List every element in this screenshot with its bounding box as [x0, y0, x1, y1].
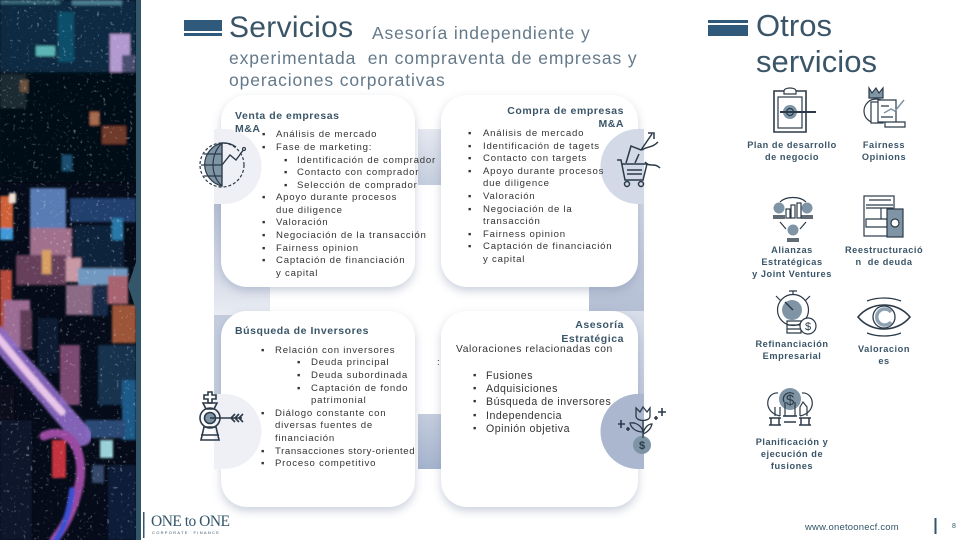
text: Búsqueda de Inversores	[235, 325, 415, 469]
label: Fairness	[863, 140, 905, 150]
label: Estratégicas	[761, 257, 823, 267]
list: Venta services: Fase de marketing:	[276, 142, 372, 153]
list: Venta services: Análisis de mercado	[276, 129, 377, 140]
list: Compra services: y capital	[483, 254, 525, 265]
item: Planificación	[742, 388, 842, 473]
list: Compra services: Apoyo durante procesos	[483, 166, 604, 177]
list: Búsqueda services: Proceso competitivo	[275, 458, 376, 469]
label: fusiones	[771, 461, 813, 471]
list: Compra services: Fairness opinion	[483, 229, 566, 240]
item: Refinanciación	[755, 290, 829, 361]
heading: Servicios: Servicios	[229, 11, 353, 44]
label	[747, 140, 837, 162]
list: Asesoría topics: ▪	[473, 396, 477, 407]
list: Compra services: Análisis de mercado	[483, 128, 584, 139]
list: Búsqueda services	[261, 345, 415, 469]
intro: Valoraciones: Valoraciones relacionadas con	[456, 344, 613, 355]
list: Compra services: ▪	[468, 141, 472, 152]
panel: Venta de empresas	[221, 95, 415, 287]
list: Búsqueda services: Captación de fondo	[311, 383, 408, 394]
list: Búsqueda services: financiación	[275, 433, 335, 444]
heading: Otros servicios	[756, 8, 877, 79]
list: Búsqueda services: ▪	[261, 458, 265, 469]
icon: stopwatch with coins: $	[805, 321, 811, 333]
label: Planificación y	[756, 437, 828, 447]
icon: rose with dollar: $	[639, 440, 645, 452]
label: Plan de desarrollo	[747, 140, 837, 150]
panel: Búsqueda de Inversores	[221, 311, 415, 507]
footer: website: www.onetoonecf.com	[805, 522, 899, 533]
heading: Venta de empresas: M&A	[235, 123, 261, 135]
text: Compra de empresas	[468, 105, 624, 265]
intro: Valoraciones: :	[437, 357, 440, 368]
list: Asesoría topics: Opinión objetiva	[486, 423, 570, 435]
label	[742, 436, 842, 472]
label: es	[878, 356, 890, 366]
list: Compra services: ▪	[468, 128, 472, 139]
list: Búsqueda services: Transacciones story-oriented	[275, 446, 415, 457]
accent circles	[214, 129, 644, 469]
subheading text: Asesoría independiente y	[372, 23, 591, 43]
list: Venta services: ▪	[262, 243, 266, 254]
list: Asesoría topics: ▪	[473, 383, 477, 394]
list: Búsqueda services: Diálogo constante con	[275, 408, 386, 419]
list: Búsqueda services: ▪	[261, 345, 265, 356]
icon: shopping cart with chart	[617, 132, 660, 188]
list: Venta services: ▪	[284, 155, 288, 166]
list: Asesoría topics: Fusiones	[486, 370, 533, 382]
icon: documents	[863, 195, 904, 238]
list: Compra services: Captación de financiación	[483, 241, 612, 252]
icon: rose with dollar	[618, 406, 666, 454]
label: Valoracion	[858, 344, 910, 354]
label	[752, 245, 832, 279]
side strip with notch	[128, 0, 141, 540]
footer: logo: ONE to ONE	[151, 513, 230, 530]
list: Búsqueda services: Deuda principal	[311, 357, 389, 368]
list: Búsqueda services: patrimonial	[311, 395, 367, 406]
heading: Otros servicios: Otros	[756, 8, 832, 43]
list: Venta services: ▪	[262, 255, 266, 266]
heading: Asesoría Estratégica: Asesoría	[575, 319, 624, 331]
list: Búsqueda services: ▪	[297, 383, 301, 394]
heading: Venta de empresas: Venta de empresas	[235, 110, 340, 122]
label: Empresarial	[763, 351, 821, 361]
heading: Compra de empresas	[507, 105, 624, 130]
list: Compra services: ▪	[468, 241, 472, 252]
list: Venta services	[262, 129, 436, 279]
list: Asesoría topics: ▪	[473, 410, 477, 421]
list: Compra services: ▪	[468, 153, 472, 164]
icon: eye	[857, 298, 911, 336]
list: Venta services: Valoración	[276, 217, 328, 228]
list: Compra services: ▪	[468, 166, 472, 177]
text: Venta de empresas	[235, 110, 436, 279]
label: n de deuda	[855, 257, 913, 267]
footer: separator and page number	[934, 518, 958, 535]
list: Venta services: Selección de comprador	[297, 180, 418, 191]
list: Venta services: Identificación de comprador	[297, 155, 436, 166]
label: y Joint Ventures	[752, 269, 832, 279]
list: Búsqueda services: ▪	[297, 357, 301, 368]
list: Venta services: due diligence	[276, 205, 343, 216]
list: Venta services: ▪	[284, 167, 288, 178]
item: Plan de desarrollo	[747, 87, 837, 162]
header: Otros servicios	[708, 8, 877, 79]
list: Venta services: ▪	[284, 180, 288, 191]
subheading text	[229, 23, 637, 90]
list: Búsqueda services: Relación con inversores	[275, 345, 395, 356]
heading: Asesoría Estratégica	[561, 319, 624, 345]
icon: idea bulbs with bars	[773, 196, 813, 242]
list: Venta services: y capital	[276, 268, 318, 279]
label: de negocio	[765, 152, 819, 162]
label: Opinions	[862, 152, 906, 162]
item: Fairness Opinions	[862, 86, 906, 162]
list: Compra services: ▪	[468, 229, 472, 240]
list: Compra services: transacción	[483, 216, 541, 227]
list: Búsqueda services: diversas fuentes de	[275, 420, 373, 431]
list: Búsqueda services: ▪	[297, 370, 301, 381]
heading: Otros servicios: servicios	[756, 44, 877, 79]
footer: logo	[143, 512, 233, 538]
subheading text: experimentada en compraventa de empresas y	[229, 48, 637, 68]
list: Venta services: ▪	[262, 217, 266, 228]
intro: Valoraciones	[437, 344, 613, 368]
list: Compra services: Identificación de tagets	[483, 141, 600, 152]
label: Reestructuració	[845, 245, 923, 255]
list: Compra services: Negociación de la	[483, 204, 573, 215]
item: Reestructuración	[845, 195, 923, 267]
list: Asesoría topics	[473, 370, 611, 435]
list: Compra services: Valoración	[483, 191, 535, 202]
label: Alianzas	[771, 245, 813, 255]
list: Venta services: Apoyo durante procesos	[276, 192, 397, 203]
subheading text: operaciones corporativas	[229, 70, 446, 90]
icon: title bars	[184, 20, 222, 36]
heading: Búsqueda de Inversores: Búsqueda de Inversores	[235, 325, 369, 337]
list: Asesoría topics: Adquisiciones	[486, 383, 558, 395]
panel: Asesoría Estratégica	[441, 311, 638, 507]
list: Venta services: ▪	[262, 142, 266, 153]
list: Asesoría topics: ▪	[473, 370, 477, 381]
list: Venta services: Negociación de la transacción	[276, 230, 427, 241]
footer: separator and page number: 8	[952, 523, 956, 530]
list: Compra services: Contacto con targets	[483, 153, 587, 164]
label: Refinanciación	[755, 339, 829, 349]
header: Servicios	[184, 11, 637, 90]
list: Compra services	[468, 128, 612, 265]
list: Venta services: Contacto con comprador	[297, 167, 419, 178]
list: Venta services: Fairness opinion	[276, 243, 359, 254]
footer: logo: CORPORATE FINANCE	[152, 530, 220, 535]
label: ejecución de	[761, 449, 823, 459]
heading: Venta de empresas	[235, 110, 340, 135]
list: Venta services: ▪	[262, 230, 266, 241]
label	[862, 140, 906, 162]
heading: Compra de empresas: Compra de empresas	[507, 105, 624, 117]
icon: report and crown	[863, 86, 906, 128]
item: Alianzas	[752, 196, 832, 279]
icon: three bulbs	[766, 388, 814, 430]
icon: stopwatch with coins	[772, 289, 818, 337]
list: Venta services: Captación de financiación	[276, 255, 405, 266]
list: Búsqueda services: ▪	[261, 408, 265, 419]
background panel shapes	[214, 129, 644, 469]
label	[742, 338, 842, 362]
label	[845, 343, 923, 367]
list: Asesoría topics: Búsqueda de inversores	[486, 396, 611, 408]
text: Asesoría Estratégica	[437, 319, 624, 435]
photo: city at night	[0, 0, 136, 540]
icon: title bars	[708, 20, 748, 36]
list: Venta services: ▪	[262, 129, 266, 140]
list: Asesoría topics: Independencia	[486, 410, 562, 422]
icon: chess king with arrow	[199, 391, 244, 441]
icon: three bulbs: $	[786, 392, 795, 409]
list: Compra services: ▪	[468, 191, 472, 202]
list: Búsqueda services: ▪	[261, 446, 265, 457]
list: Venta services: ▪	[262, 192, 266, 203]
heading: Compra de empresas: M&A	[598, 118, 624, 130]
icon: globe with chart	[199, 142, 246, 188]
list: Compra services: due diligence	[483, 178, 550, 189]
list: Asesoría topics: ▪	[473, 423, 477, 434]
label	[845, 245, 923, 267]
heading: Asesoría Estratégica: Estratégica	[561, 333, 624, 345]
list: Búsqueda services: Deuda subordinada	[311, 370, 408, 381]
list: Compra services: ▪	[468, 204, 472, 215]
icon: clipboard with gear	[773, 87, 816, 133]
item: Valoraciones	[845, 298, 923, 368]
panel: Compra de empresas	[441, 95, 638, 287]
